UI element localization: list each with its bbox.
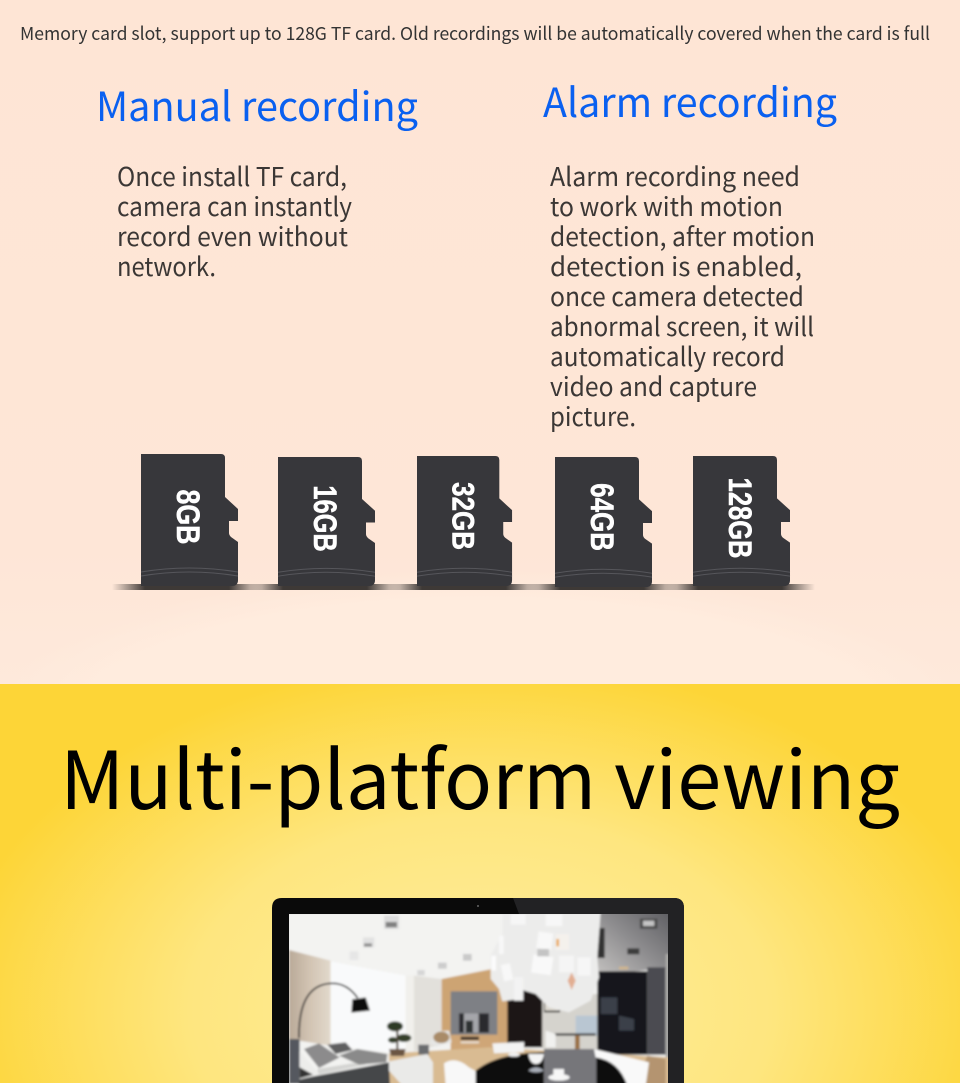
card shadows bbox=[112, 584, 815, 590]
text block: alarm recording description: video and capture bbox=[550, 367, 757, 404]
icon: 16GB memory card: 16GB bbox=[307, 485, 343, 552]
panel: multi-platform viewing section bbox=[0, 684, 960, 1083]
icon: 32GB memory card bbox=[417, 456, 512, 586]
icon: 64GB memory card: 64GB bbox=[584, 483, 620, 551]
icon: 128GB memory card bbox=[693, 456, 790, 586]
text block: alarm recording description: automatically record bbox=[550, 337, 785, 374]
text block: alarm recording description: picture. bbox=[550, 397, 636, 434]
title: Multi-platform viewing bbox=[60, 717, 900, 833]
floor glow bbox=[0, 570, 960, 870]
text block: alarm recording description: once camera detected bbox=[550, 277, 804, 314]
cup and saucer bbox=[548, 1069, 570, 1081]
text block: manual recording description: record even without bbox=[117, 217, 348, 254]
heading: alarm recording: Alarm recording bbox=[543, 71, 837, 129]
text block: manual recording description bbox=[117, 157, 352, 284]
armchair bbox=[430, 1031, 452, 1047]
text block: manual recording description: camera can instantly bbox=[117, 187, 352, 224]
back chair bbox=[492, 1042, 524, 1053]
ceiling spotlights bbox=[350, 916, 657, 975]
laptop frame bbox=[272, 898, 684, 1083]
bowl reflection bbox=[528, 1067, 544, 1072]
floor bbox=[389, 1047, 670, 1083]
text block: alarm recording description: to work with motion bbox=[550, 187, 783, 224]
television bbox=[459, 1013, 489, 1033]
icon: 64GB memory card bbox=[555, 457, 652, 587]
icon: 128GB memory card: 128GB bbox=[722, 478, 758, 558]
dark doorway bbox=[506, 989, 544, 1049]
icon: 16GB memory card bbox=[278, 457, 375, 586]
left dining chair bbox=[442, 1058, 478, 1083]
dining table bbox=[476, 1051, 637, 1083]
bowl bbox=[528, 1054, 544, 1064]
icon: 32GB memory card: 32GB bbox=[445, 482, 480, 550]
glass side table bbox=[389, 1054, 433, 1083]
text block: alarm recording description: abnormal screen, it will bbox=[550, 307, 814, 344]
small plate bbox=[508, 1053, 520, 1057]
kitchen edge bbox=[666, 954, 670, 1057]
right dining chair bbox=[594, 1049, 649, 1083]
wood wall bbox=[442, 966, 509, 1046]
curtain bbox=[289, 950, 331, 1046]
icon: 8GB memory card: 8GB bbox=[170, 490, 206, 544]
icon: 8GB memory card bbox=[141, 454, 238, 586]
bonsai bbox=[387, 1021, 411, 1056]
text block: alarm recording description: detection, after motion bbox=[550, 217, 815, 254]
stack of magazines bbox=[418, 1045, 429, 1055]
photo: living room interior bbox=[287, 912, 670, 1083]
gray recess bbox=[451, 991, 497, 1039]
pillar wall bbox=[406, 976, 414, 1054]
text block: alarm recording description: detection is enabled, bbox=[550, 247, 802, 284]
laptop with living room photo bbox=[272, 898, 684, 1083]
framed picture bbox=[542, 1002, 562, 1014]
floor lamp bbox=[299, 983, 370, 1038]
dining room wall bbox=[542, 994, 599, 1049]
room shell: ceiling and walls bbox=[287, 912, 670, 1083]
text block: alarm recording description bbox=[550, 157, 815, 434]
right ceiling bbox=[597, 912, 670, 976]
kitchen gray wall bbox=[647, 967, 666, 1055]
sofa bbox=[289, 1039, 390, 1083]
intro text: Memory card slot, support up to 128G TF card. Old recordings will be automatically covered when the card is full bbox=[20, 20, 930, 46]
heading: manual recording: Manual recording bbox=[96, 75, 418, 133]
text block: manual recording description: network. bbox=[117, 247, 216, 284]
wood floor right bbox=[645, 1054, 666, 1083]
hanging paper lamp bbox=[491, 912, 601, 1012]
window bbox=[331, 961, 406, 1054]
dining room window and table bbox=[546, 1016, 597, 1054]
dark sliver by lamp bbox=[597, 928, 605, 958]
kitchen glass reflection bbox=[601, 997, 634, 1031]
text block: alarm recording description: Alarm recording need bbox=[550, 157, 800, 194]
side wall bbox=[414, 976, 442, 1051]
table reflection bbox=[544, 1049, 596, 1083]
dark kitchen bbox=[597, 971, 647, 1055]
text block: manual recording description: Once install TF card, bbox=[117, 157, 347, 194]
media console bbox=[451, 1035, 499, 1051]
